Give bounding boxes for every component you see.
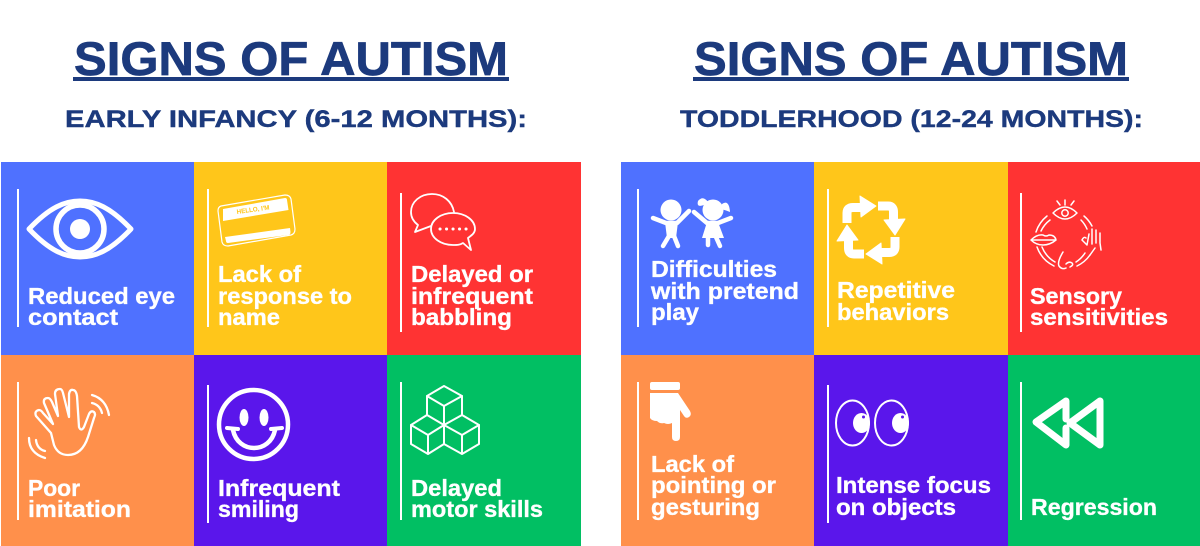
label: Repetitive xyxy=(837,277,955,303)
label xyxy=(837,277,955,325)
panel: regression xyxy=(1008,355,1200,546)
label xyxy=(218,261,352,330)
label: gesturing xyxy=(651,494,760,520)
icon: rewind xyxy=(1036,401,1100,445)
icon: name badge: HELLO, I'M xyxy=(236,204,270,216)
subtitle: toddlerhood: TODDLERHOOD (12-24 MONTHS): xyxy=(680,106,1143,133)
label: with pretend xyxy=(650,278,799,304)
label: babbling xyxy=(411,304,512,330)
label xyxy=(411,261,533,330)
label: motor skills xyxy=(411,496,543,522)
label: Regression xyxy=(1031,494,1157,520)
panel: intense focus on objects xyxy=(814,355,1008,546)
icon: pointing hand xyxy=(650,382,691,441)
label xyxy=(650,256,799,325)
label xyxy=(1030,283,1168,330)
title: right: SIGNS OF AUTISM xyxy=(694,32,1128,85)
panel: lack of pointing or gesturing xyxy=(621,355,814,546)
label: Lack of xyxy=(218,261,301,287)
label: behaviors xyxy=(837,299,949,325)
panel: infrequent smiling xyxy=(194,355,387,546)
panel: sensory sensitivities xyxy=(1008,162,1200,355)
panel: lack of response to name xyxy=(194,162,387,355)
label: Reduced eye xyxy=(28,283,175,309)
label: Difficulties xyxy=(651,256,777,282)
label: contact xyxy=(28,304,118,330)
label xyxy=(411,475,543,522)
label: Lack of xyxy=(651,451,734,477)
panel: reduced eye contact xyxy=(1,162,194,355)
label: Sensory xyxy=(1030,283,1122,309)
label: pointing or xyxy=(651,472,776,498)
subtitle: early infancy: EARLY INFANCY (6-12 MONTHS): xyxy=(65,106,527,133)
label xyxy=(28,283,175,330)
icon: smiley xyxy=(219,390,288,459)
icon: name badge xyxy=(218,195,295,246)
icon: speech bubbles xyxy=(411,194,475,250)
icon: eye xyxy=(29,201,131,257)
label xyxy=(651,451,776,520)
icon: googly eyes xyxy=(836,400,909,446)
label: Delayed or xyxy=(411,261,533,287)
label: smiling xyxy=(218,496,299,522)
label: on objects xyxy=(836,494,956,520)
icon: children xyxy=(653,198,731,246)
label: play xyxy=(651,299,699,325)
panel: poor imitation xyxy=(1,355,194,546)
icon: waving hand xyxy=(29,389,109,458)
label: sensitivities xyxy=(1030,304,1168,330)
panel: difficulties with pretend play xyxy=(621,162,814,355)
label: imitation xyxy=(28,496,131,522)
title: left: SIGNS OF AUTISM xyxy=(74,32,508,85)
label: Delayed xyxy=(411,475,502,501)
label xyxy=(28,475,131,522)
label: infrequent xyxy=(411,283,533,309)
label: Intense focus xyxy=(836,472,991,498)
label: Infrequent xyxy=(218,475,340,501)
icon: cycle arrows xyxy=(837,196,905,264)
icon: five senses xyxy=(1031,200,1101,269)
label: name xyxy=(218,304,280,330)
label xyxy=(836,472,991,520)
label xyxy=(218,475,340,522)
panel: delayed motor skills xyxy=(387,355,581,546)
panel: repetitive behaviors xyxy=(814,162,1008,355)
panel: delayed or infrequent babbling xyxy=(387,162,581,355)
icon: cubes xyxy=(411,386,479,454)
label: response to xyxy=(218,283,352,309)
label: Poor xyxy=(28,475,80,501)
